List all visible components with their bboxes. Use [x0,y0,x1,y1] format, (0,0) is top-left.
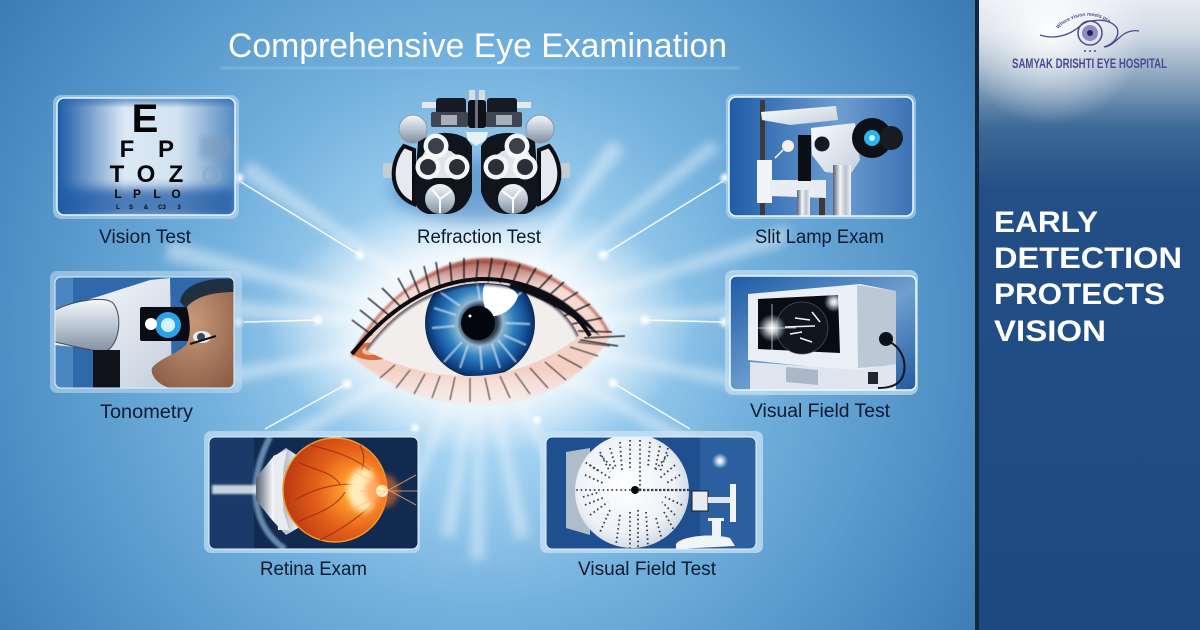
halo behind eye [265,195,695,455]
light rays around the eye [165,140,790,560]
card: Slit Lamp Exam [726,94,916,219]
eye chart letters: E [132,97,158,141]
eye chart letters: P [158,136,174,163]
label: Retina Exam: Retina Exam [260,559,367,580]
eye chart letters [110,97,183,211]
perimeter dome [566,448,590,535]
eye chart letters: O [171,187,181,201]
eye chart letters: C3 [158,205,166,211]
tonometer instrument [55,278,172,388]
eye chart letters: P [133,187,141,201]
label: Vision Test: Vision Test [99,227,192,248]
slit lamp instrument [760,100,765,216]
eye chart letters: T [110,161,125,188]
sidebar headline: VISION [994,315,1106,348]
label: Refraction Test: Refraction Test [417,227,542,248]
perimeter machine [748,284,896,372]
eye chart letters: O [137,161,155,188]
iris [365,283,579,376]
title: Comprehensive Eye Examination [228,27,727,65]
eye chart letters: 3 [177,205,181,211]
card: Tonometry [50,271,242,393]
label: Slit Lamp Exam: Slit Lamp Exam [755,227,884,248]
eye chart letters: L [116,205,120,211]
eye chart letters: F [120,136,134,163]
eye chart letters: L [153,187,161,201]
sidebar headline: EARLY [994,206,1098,239]
sidebar headline [994,206,1182,348]
retina globe [283,438,387,542]
upper lashes [352,258,625,346]
label: Tonometry: Tonometry [100,402,194,423]
small instrument [692,491,708,511]
label: Visual Field Test (bottom): Visual Field Test [578,559,717,580]
patient face [152,292,234,388]
card: Retina Exam [204,431,420,553]
inner eye corner [350,343,388,360]
label: Visual Field Test (right): Visual Field Test [750,401,891,422]
sidebar headline: DETECTION [994,242,1182,275]
light beam [212,485,258,494]
eye chart letters: Z [169,161,183,188]
eye chart letters: L [114,187,122,201]
eyelid skin [350,258,612,406]
upper lid edge [352,279,590,354]
card: Visual Field Test (bottom) [540,431,763,553]
sidebar headline: PROTECTS [994,278,1165,311]
eye chart letters: S [129,205,133,211]
sclera [365,283,579,376]
connector lines with glowing nodes [231,171,733,435]
central eye illustration [350,258,625,406]
icon: phoropter refraction device [383,90,570,222]
lower lashes [380,342,610,402]
card: Visual Field Test (right) [725,270,918,395]
eye chart letters: & [144,205,149,211]
hospital logo [1012,13,1167,71]
card: Vision Test [53,94,239,219]
lens holder [256,448,298,535]
